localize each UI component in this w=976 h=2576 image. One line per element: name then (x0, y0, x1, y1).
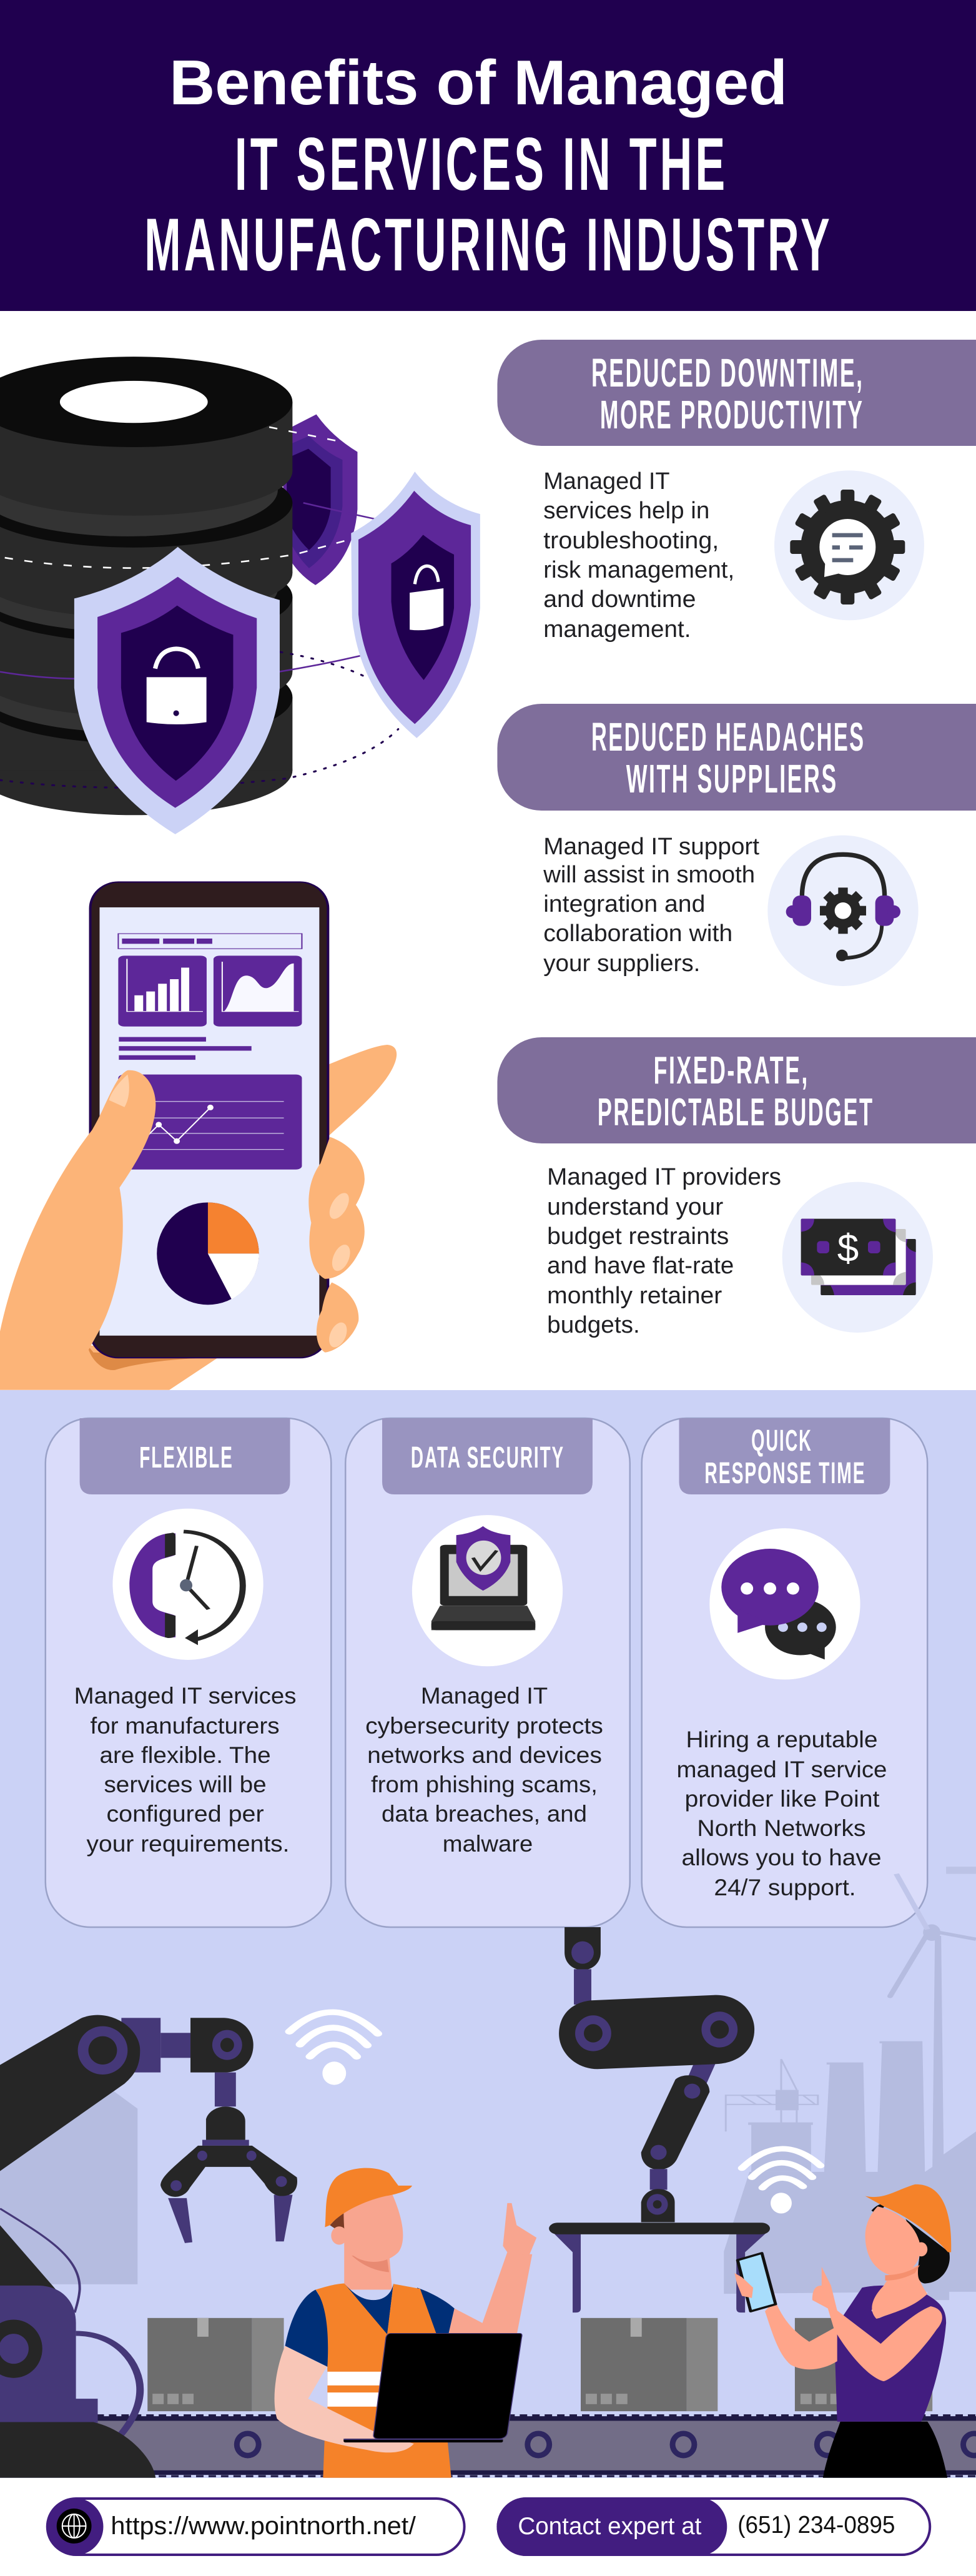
panel: flexible: Managed IT services (74, 1683, 296, 1709)
panel: flexible: for manufacturers (91, 1713, 280, 1739)
benefit 1 text: Managed IT (543, 468, 670, 495)
benefit 3 heading (497, 1037, 976, 1143)
icon: banknotes: $ (837, 1227, 859, 1270)
icon: globe (62, 2514, 86, 2538)
panel: three feature cards (46, 1418, 927, 1927)
benefit 2 text: your suppliers. (543, 950, 700, 977)
conveyor belt (97, 2416, 976, 2476)
benefit 3 text: budgets. (547, 1312, 640, 1338)
footer: website link: https://www.pointnorth.net/ (111, 2512, 417, 2540)
title banner: Benefits of Managed (169, 48, 787, 118)
panel: flexible (46, 1418, 331, 1927)
benefit 3 text: Managed IT providers (547, 1164, 781, 1190)
icon: chat bubbles (709, 1528, 860, 1680)
background: factory silhouette (0, 1924, 976, 2300)
benefit 2 text (543, 834, 760, 977)
panel: quick response time: QUICK (751, 1424, 812, 1458)
panel: flexible: services will be (104, 1772, 267, 1797)
benefit 2 text: collaboration with (543, 920, 732, 947)
panel: flexible: are flexible. The (99, 1742, 271, 1768)
benefit 1 heading (497, 340, 976, 446)
panel: flexible: your requirements. (87, 1831, 290, 1857)
footer: website link (46, 2498, 465, 2555)
title banner (0, 0, 976, 311)
benefit 3 text: monthly retainer (547, 1283, 722, 1309)
panel: quick response time: North Networks (697, 1815, 866, 1841)
icon: laptop with shield (412, 1515, 563, 1666)
panel: data security: DATA SECURITY (411, 1441, 564, 1474)
benefit 3 text: understand your (547, 1194, 723, 1220)
benefit 2 heading (497, 704, 976, 811)
panel: data security (345, 1418, 630, 1927)
panel: quick response time: RESPONSE TIME (704, 1457, 866, 1490)
icon: headset with gear (767, 836, 919, 986)
benefit 1 text: troubleshooting, (543, 528, 719, 554)
icon: banknotes (782, 1182, 933, 1333)
benefit 2 text: will assist in smooth (543, 862, 755, 888)
icon: gear with speech bubble (774, 470, 924, 620)
benefit 3 text: and have flat-rate (547, 1253, 734, 1279)
icon: wifi left (290, 2012, 378, 2085)
panel: data security: cybersecurity protects (365, 1713, 603, 1739)
benefit 1 text (543, 468, 734, 643)
panel: data security: Managed IT (421, 1683, 548, 1709)
benefit 2 text: Managed IT support (543, 834, 760, 860)
benefit 1 text: risk management, (543, 557, 734, 583)
benefit 3 text (547, 1164, 781, 1338)
panel: data security: networks and devices (367, 1742, 602, 1768)
panel: quick response time (642, 1418, 927, 1927)
wind turbine blades over card (896, 1870, 976, 1930)
benefit 2 text: integration and (543, 891, 705, 917)
footer: contact number (496, 2497, 930, 2556)
panel: data security: from phishing scams, (371, 1772, 598, 1797)
panel: quick response time: managed IT service (677, 1757, 887, 1782)
illustration: factory floor with robots and workers (0, 1927, 976, 2478)
illustration: hand holding a phone with charts (0, 882, 397, 1390)
benefit 1 text: management. (543, 616, 691, 643)
panel: quick response time: Hiring a reputable (686, 1727, 877, 1752)
robot arm: right clamp (549, 1927, 770, 2312)
panel: data security: data breaches, and (382, 1801, 587, 1827)
footer: contact number: Contact expert at (518, 2513, 702, 2540)
panel: quick response time: provider like Point (684, 1786, 879, 1812)
robot arm: left gripper (0, 2015, 297, 2478)
icon: phone with clock (112, 1509, 264, 1660)
illustration: database with security shields (0, 357, 480, 834)
benefit 1 text: services help in (543, 498, 709, 524)
icon: wifi right (742, 2149, 821, 2214)
panel: data security: malware (443, 1831, 533, 1857)
panel: quick response time: 24/7 support. (714, 1875, 856, 1900)
benefit 1 text: and downtime (543, 586, 696, 613)
panel: flexible: FLEXIBLE (139, 1441, 234, 1474)
worker: man with laptop (275, 2168, 536, 2478)
worker: woman with phone (734, 2184, 951, 2478)
lavender section background (0, 1390, 976, 2478)
panel: quick response time: allows you to have (681, 1845, 881, 1870)
cardboard boxes (147, 2318, 932, 2411)
panel: flexible: configured per (106, 1801, 264, 1827)
footer: contact number: (651) 234-0895 (737, 2512, 895, 2539)
benefit 3 heading: FIXED-RATE, (654, 1049, 809, 1092)
benefit 3 text: budget restraints (547, 1223, 729, 1250)
